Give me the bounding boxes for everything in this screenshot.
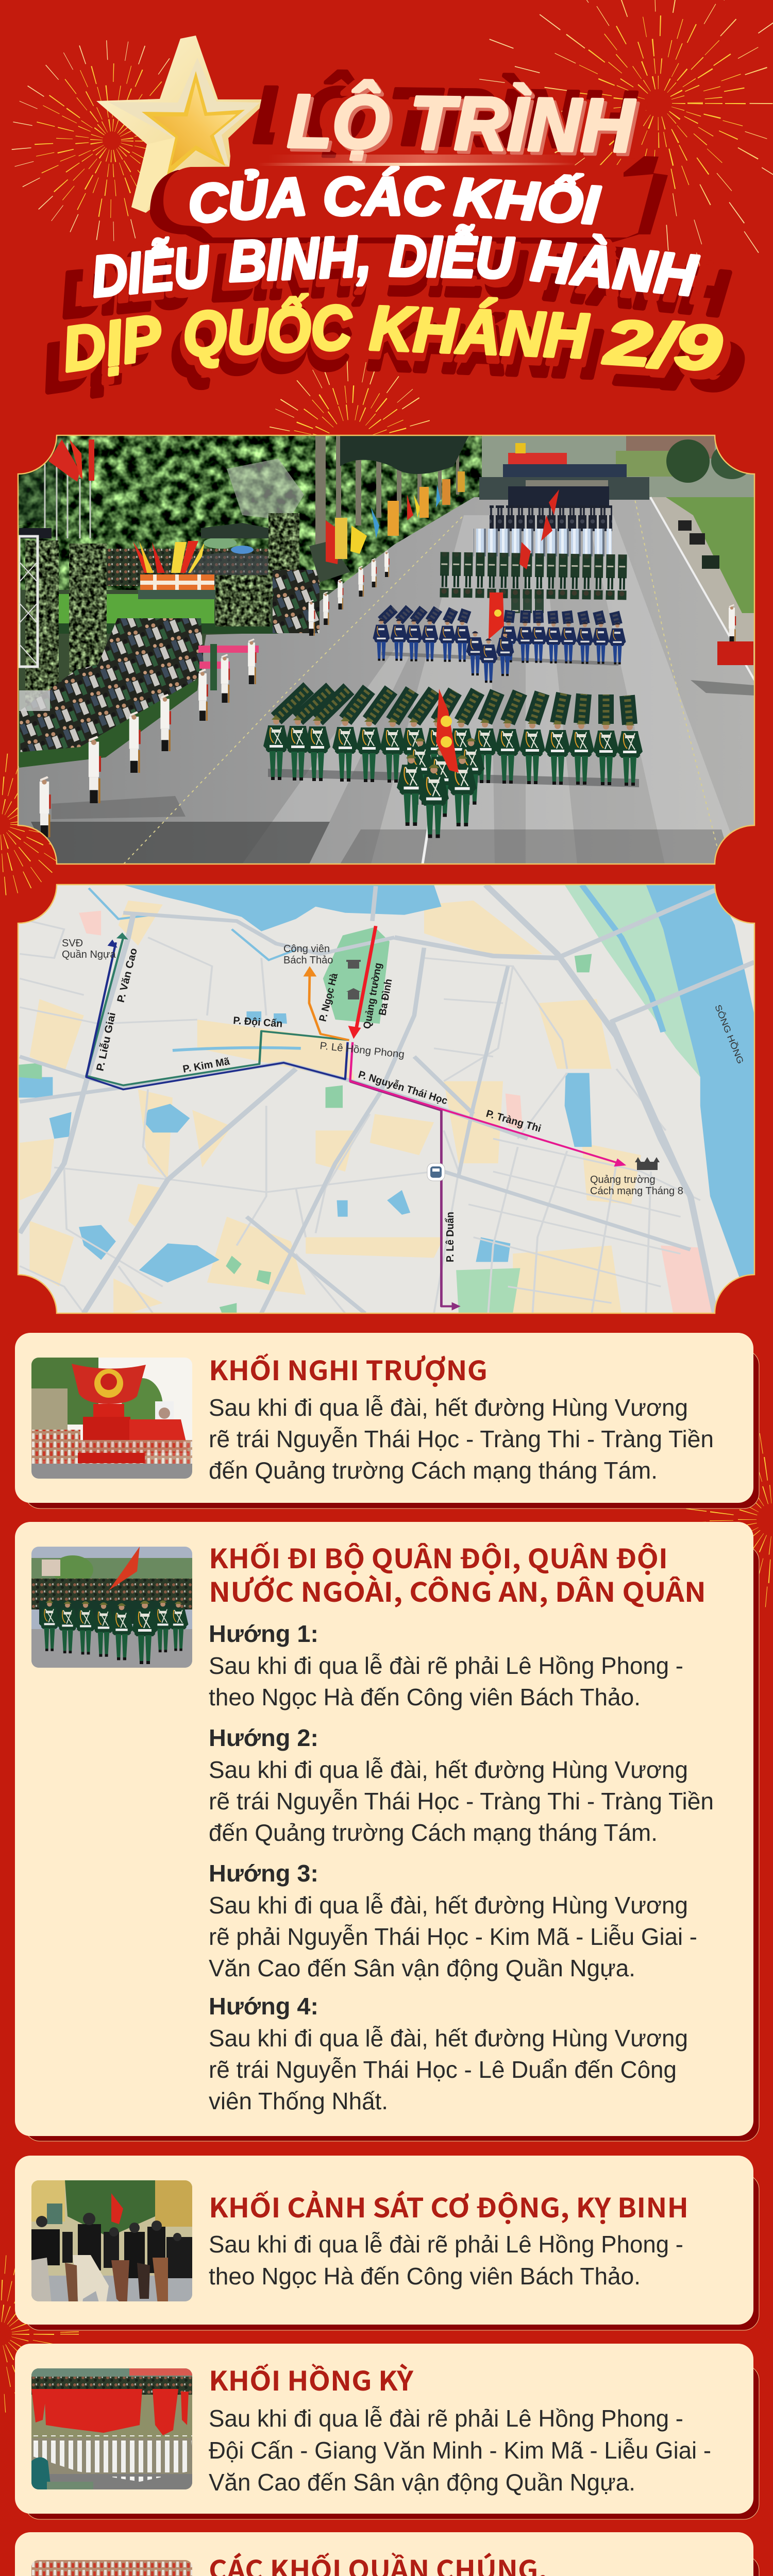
title line 3: DIỄU BINH, DIỄU HÀNH <box>58 224 731 331</box>
camouflage towers <box>69 544 107 681</box>
map labels: P. Ngọc Hà <box>317 972 340 1023</box>
palm trunks <box>315 436 459 545</box>
road shadows <box>31 822 330 864</box>
map labels: Công viên <box>283 943 330 955</box>
title line 3: DIỄU BINH, DIỄU HÀNH: DIỄU <box>58 248 195 331</box>
direction 3: Sau khi đi qua lễ đài, hết đường Hùng Vương <box>209 1892 688 1919</box>
panel: parade photo <box>18 435 754 864</box>
trees <box>18 435 482 590</box>
title line 2: CỦA CÁC KHỐI: KHỐI <box>453 166 601 235</box>
direction 1 <box>209 1620 683 1710</box>
title line 1: LỘ TRÌNH: LỘ TRÌNH <box>253 70 637 165</box>
description: Văn Cao đến Sân vận động Quần Ngựa. <box>209 2469 635 2496</box>
panel: route map <box>18 885 754 1313</box>
title line 1: LỘ TRÌNH: LỘ TRÌNH <box>287 79 635 167</box>
panel: Khối hồng kỳ <box>15 2344 759 2519</box>
title line 4: DỊP QUỐC KHÁNH 2/9: KHÁNH <box>368 293 591 371</box>
marching block: blue uniforms <box>373 592 626 683</box>
title line 3: DIỄU BINH, DIỄU HÀNH: DIỄU <box>77 240 206 318</box>
title pill background <box>150 156 668 244</box>
fireworks: top right <box>491 0 773 270</box>
title line 4: DỊP QUỐC KHÁNH 2/9: KHÁNH <box>367 309 602 392</box>
honor guards <box>40 550 736 837</box>
heading: KHỐI CẢNH SÁT CƠ ĐỘNG, KỴ BINH <box>209 2187 688 2225</box>
routes <box>86 926 616 1306</box>
direction 2: Hướng 2: <box>209 1724 318 1751</box>
direction 4: Hướng 4: <box>209 1993 318 2020</box>
title line 4: DỊP QUỐC KHÁNH 2/9: QUỐC <box>177 298 353 378</box>
title line 4: DỊP QUỐC KHÁNH 2/9: 2/9 <box>602 307 723 384</box>
title line 4: DỊP QUỐC KHÁNH 2/9: DỊP <box>58 301 166 385</box>
photo: mounted police <box>31 2180 192 2319</box>
description: Sau khi đi qua lễ đài, hết đường Hùng Vương <box>209 1394 688 1421</box>
title line 3: DIỄU BINH, DIỄU HÀNH: DIỄU <box>389 237 527 310</box>
title line 1: LỘ TRÌNH: LỘ TRÌNH <box>290 82 638 171</box>
icon: railway station <box>427 1163 445 1181</box>
direction 2: rẽ trái Nguyễn Thái Học - Tràng Thi - Tràng Tiền <box>209 1788 714 1815</box>
panel: Các khối quần chúng <box>15 2532 759 2576</box>
map areas <box>20 901 641 1313</box>
route arrowheads <box>108 933 626 1310</box>
description <box>209 1394 714 1484</box>
flag poles and flags <box>45 443 90 541</box>
main roads <box>20 885 754 1313</box>
map labels: P. Kim Mã <box>182 1056 231 1075</box>
photo: red flags <box>31 2368 192 2489</box>
title line 3: DIỄU BINH, DIỄU HÀNH: BINH, <box>221 229 372 302</box>
map labels: P. Đội Cấn <box>233 1015 283 1030</box>
map labels: P. Liễu Giai <box>93 1011 118 1072</box>
direction 3 <box>209 1860 697 1981</box>
title line 3: DIỄU BINH, DIỄU HÀNH: BINH, <box>227 224 373 294</box>
title line 3: DIỄU BINH, DIỄU HÀNH: DIỄU <box>389 229 520 298</box>
description: Sau khi đi qua lễ đài rẽ phải Lê Hồng Phong - <box>209 2231 683 2258</box>
title glow line <box>258 155 577 166</box>
far marching blocks <box>503 464 627 477</box>
direction 4 <box>209 1993 688 2114</box>
title line 4: DỊP QUỐC KHÁNH 2/9: KHÁNH <box>368 299 594 379</box>
map labels: Quần Ngựa <box>62 949 116 960</box>
title line 2: CỦA CÁC KHỐI: CÁC <box>323 167 444 227</box>
banners and flags along the avenue <box>326 443 567 564</box>
map labels: Cách mạng Tháng 8 <box>590 1185 683 1197</box>
description: theo Ngọc Hà đến Công viên Bách Thảo. <box>209 2263 641 2290</box>
title line 4: DỊP QUỐC KHÁNH 2/9 <box>39 292 744 406</box>
icon: August Revolution Square building <box>635 1157 660 1170</box>
direction 3: rẽ phải Nguyễn Thái Học - Kim Mã - Liễu Giai - <box>209 1923 697 1950</box>
map labels: Ba Đình <box>377 978 394 1016</box>
direction 2: Sau khi đi qua lễ đài, hết đường Hùng Vương <box>209 1756 688 1783</box>
title line 3: DIỄU BINH, DIỄU HÀNH: HÀNH <box>534 233 713 317</box>
title line 2: CỦA CÁC KHỐI: CỦA <box>187 166 309 234</box>
panel: Khối đi bộ <box>15 1522 759 2141</box>
minor roads <box>20 921 700 1313</box>
map frame <box>18 885 754 1313</box>
photo: ceremonial float <box>31 1358 192 1479</box>
title line 4: DỊP QUỐC KHÁNH 2/9: QUỐC <box>169 308 351 390</box>
title line 3: DIỄU BINH, DIỄU HÀNH: BINH, <box>211 236 371 314</box>
fireworks: below title <box>278 371 423 515</box>
map labels: Quảng trường <box>361 962 384 1030</box>
description <box>209 2405 711 2496</box>
heading <box>209 1537 706 1609</box>
direction 4: viên Thống Nhất. <box>209 2088 388 2114</box>
description: đến Quảng trường Cách mạng tháng Tám. <box>209 1457 658 1484</box>
title line 4: DỊP QUỐC KHÁNH 2/9: 2/9 <box>614 324 744 405</box>
title line 4: DỊP QUỐC KHÁNH 2/9: DỊP <box>52 308 162 393</box>
road light streaks <box>242 515 742 864</box>
title line 3: DIỄU BINH, DIỄU HÀNH: HÀNH <box>529 228 700 308</box>
map labels: P. Văn Cao <box>115 947 140 1004</box>
direction 3: Hướng 3: <box>209 1860 318 1887</box>
title line 4: DỊP QUỐC KHÁNH 2/9: QUỐC <box>181 292 354 369</box>
map labels: P. Nguyễn Thái Học <box>357 1068 449 1107</box>
direction 2 <box>209 1724 714 1846</box>
marching block: green uniforms <box>263 688 643 838</box>
title line 4: DỊP QUỐC KHÁNH 2/9: 2/9 <box>606 313 730 392</box>
title line 2: CỦA CÁC KHỐI <box>187 166 601 235</box>
icon: mausoleum buildings <box>346 960 361 999</box>
description: Sau khi đi qua lễ đài rẽ phải Lê Hồng Phong - <box>209 2405 683 2432</box>
direction 4: rẽ trái Nguyễn Thái Học - Lê Duẩn đến Công <box>209 2056 677 2083</box>
title line 4: DỊP QUỐC KHÁNH 2/9: DỊP <box>39 318 153 406</box>
direction 1: theo Ngọc Hà đến Công viên Bách Thảo. <box>209 1684 641 1710</box>
heading: KHỐI NGHI TRƯỢNG <box>209 1349 488 1388</box>
map labels: Bách Thảo <box>283 955 333 966</box>
description <box>209 2231 683 2290</box>
heading: KHỐI ĐI BỘ QUÂN ĐỘI, QUÂN ĐỘI <box>209 1537 668 1576</box>
map labels: P. Tràng Thi <box>485 1108 542 1134</box>
map labels: P. Lê Hồng Phong <box>319 1040 405 1060</box>
fireworks: top left <box>21 50 203 231</box>
road <box>18 497 754 864</box>
hero frame <box>18 435 754 864</box>
title line 1: LỘ TRÌNH: LỘ TRÌNH <box>272 81 646 174</box>
description: rẽ trái Nguyễn Thái Học - Tràng Thi - Tràng Tiền <box>209 1426 714 1452</box>
map labels: P. Lê Duẩn <box>445 1212 456 1262</box>
seated crowd, lawn, flags and stand <box>107 549 268 586</box>
title line 3: DIỄU BINH, DIỄU HÀNH: DIỄU <box>389 224 515 290</box>
parks <box>18 927 592 1313</box>
map labels: SVĐ <box>62 938 83 949</box>
direction 1: Sau khi đi qua lễ đài rẽ phải Lê Hồng Phong - <box>209 1652 683 1679</box>
direction 2: đến Quảng trường Cách mạng tháng Tám. <box>209 1819 658 1846</box>
panel: Khối nghi trượng <box>15 1333 759 1509</box>
icon: gold star <box>96 36 269 213</box>
heading: KHỐI HỒNG KỲ <box>209 2360 414 2398</box>
direction 3: Văn Cao đến Sân vận động Quần Ngựa. <box>209 1955 635 1981</box>
photo: crowd in ao dai <box>31 2560 192 2576</box>
title line 3: DIỄU BINH, DIỄU HÀNH: DIỄU <box>89 234 213 309</box>
map labels: SÔNG HỒNG <box>713 1003 746 1065</box>
direction 1: Hướng 1: <box>209 1620 318 1647</box>
direction 4: Sau khi đi qua lễ đài, hết đường Hùng Vương <box>209 2025 688 2052</box>
photo: marching soldiers <box>31 1547 192 1668</box>
panel: Khối cảnh sát cơ động, kỵ binh <box>15 2156 759 2330</box>
fireworks: side bursts <box>0 762 773 2576</box>
title line 3: DIỄU BINH, DIỄU HÀNH: HÀNH <box>542 242 731 330</box>
photographers crowd <box>20 618 204 757</box>
description: Đội Cấn - Giang Văn Minh - Kim Mã - Liễu Giai - <box>209 2437 711 2464</box>
heading: NƯỚC NGOÀI, CÔNG AN, DÂN QUÂN <box>209 1571 706 1609</box>
water bodies <box>18 885 592 1282</box>
sidewalk and grass on the right <box>650 497 754 685</box>
map labels: Quảng trường <box>590 1174 656 1185</box>
map labels <box>62 938 746 1262</box>
